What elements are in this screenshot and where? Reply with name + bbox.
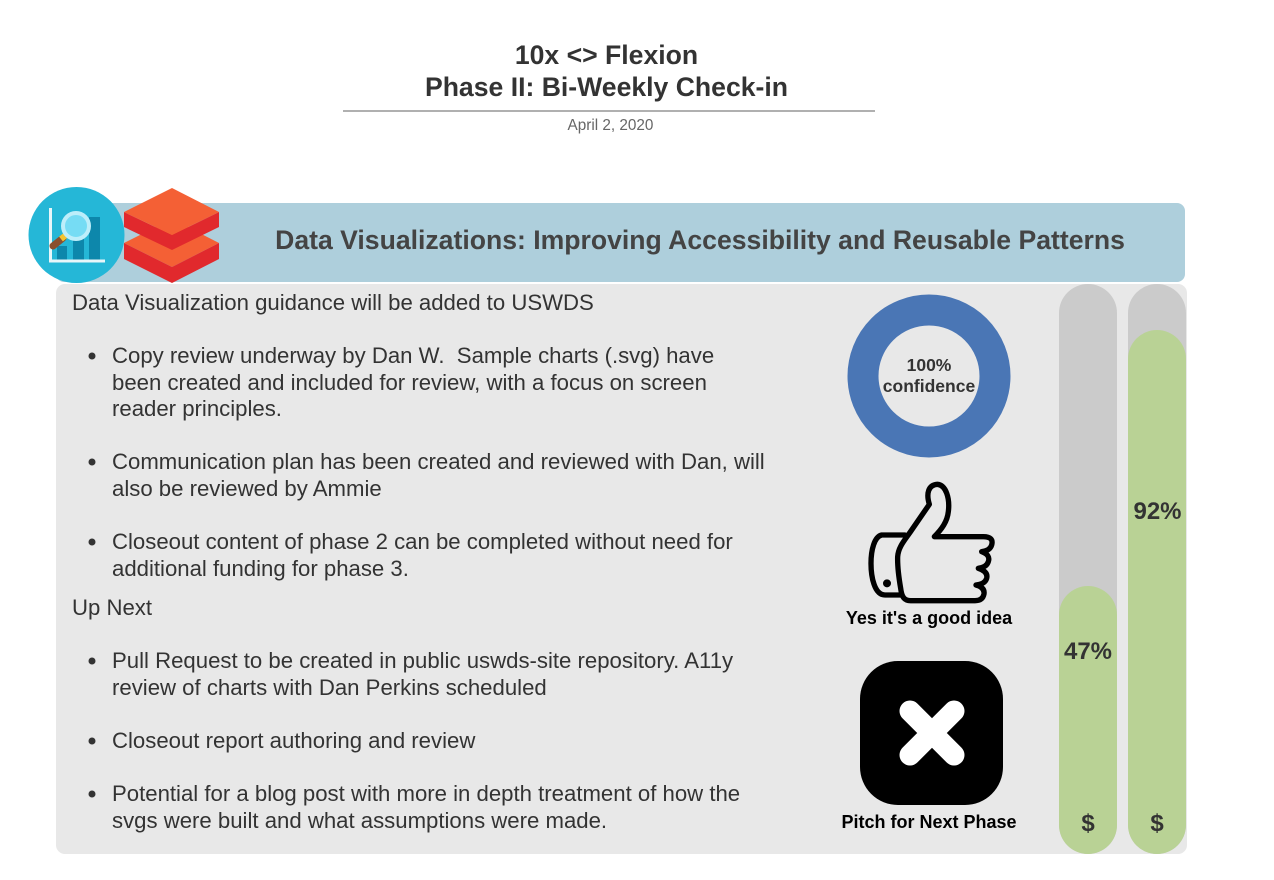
icon: thumbs up [871,484,992,601]
title: Phase II: Bi-Weekly Check-in [425,72,788,102]
text block: data visualization guidance: been created and included for review, with a focus on screen [112,370,707,395]
date: April 2, 2020 [568,117,653,134]
thumbs up label: Yes it's a good idea [846,608,1013,628]
text block: up next: svgs were built and what assumptions were made. [112,808,607,833]
text block: up next: review of charts with Dan Perkins scheduled [112,675,547,700]
bar: 92%: $ [1150,810,1164,837]
title [425,40,788,102]
text block: data visualization guidance: Communication plan has been created and reviewed with Dan, will [112,449,765,474]
text block: up next [72,595,740,833]
donut chart: confidence [863,310,995,442]
bar: 92% [1128,284,1186,854]
donut chart: confidence: confidence [883,376,975,396]
text block: up next: Closeout report authoring and review [112,728,476,753]
banner heading: Data Visualizations: Improving Accessibility and Reusable Patterns [275,225,1125,255]
title: 10x <> Flexion [515,40,698,70]
panel: content background [56,284,1187,854]
text block: data visualization guidance: also be reviewed by Ammie [112,476,382,501]
icon: x mark [860,661,1003,805]
bar: 47% [1059,284,1117,854]
text block: up next: Up Next [72,595,152,620]
bar: 47%: $ [1081,810,1095,837]
x mark label: Pitch for Next Phase [841,812,1017,832]
text block: data visualization guidance: reader principles. [112,396,282,421]
header banner [56,203,1185,282]
bar: 92%: 92% [1133,498,1182,525]
text block: data visualization guidance: Closeout content of phase 2 can be completed without need for [112,529,733,554]
donut chart: confidence: 100% [907,355,952,375]
icon: chart with magnifying glass [28,187,124,283]
icon: layered stack [124,188,219,283]
bar: 47%: 47% [1064,638,1112,665]
text block: up next: Pull Request to be created in public uswds-site repository. A11y [112,648,734,673]
text block: data visualization guidance [72,290,765,581]
text block: data visualization guidance: additional funding for phase 3. [112,556,409,581]
text block: data visualization guidance: Data Visualization guidance will be added to USWDS [72,290,594,315]
text block: up next: Potential for a blog post with more in depth treatment of how the [112,781,740,806]
text block: data visualization guidance: Copy review underway by Dan W. Sample charts (.svg) have [112,343,714,368]
